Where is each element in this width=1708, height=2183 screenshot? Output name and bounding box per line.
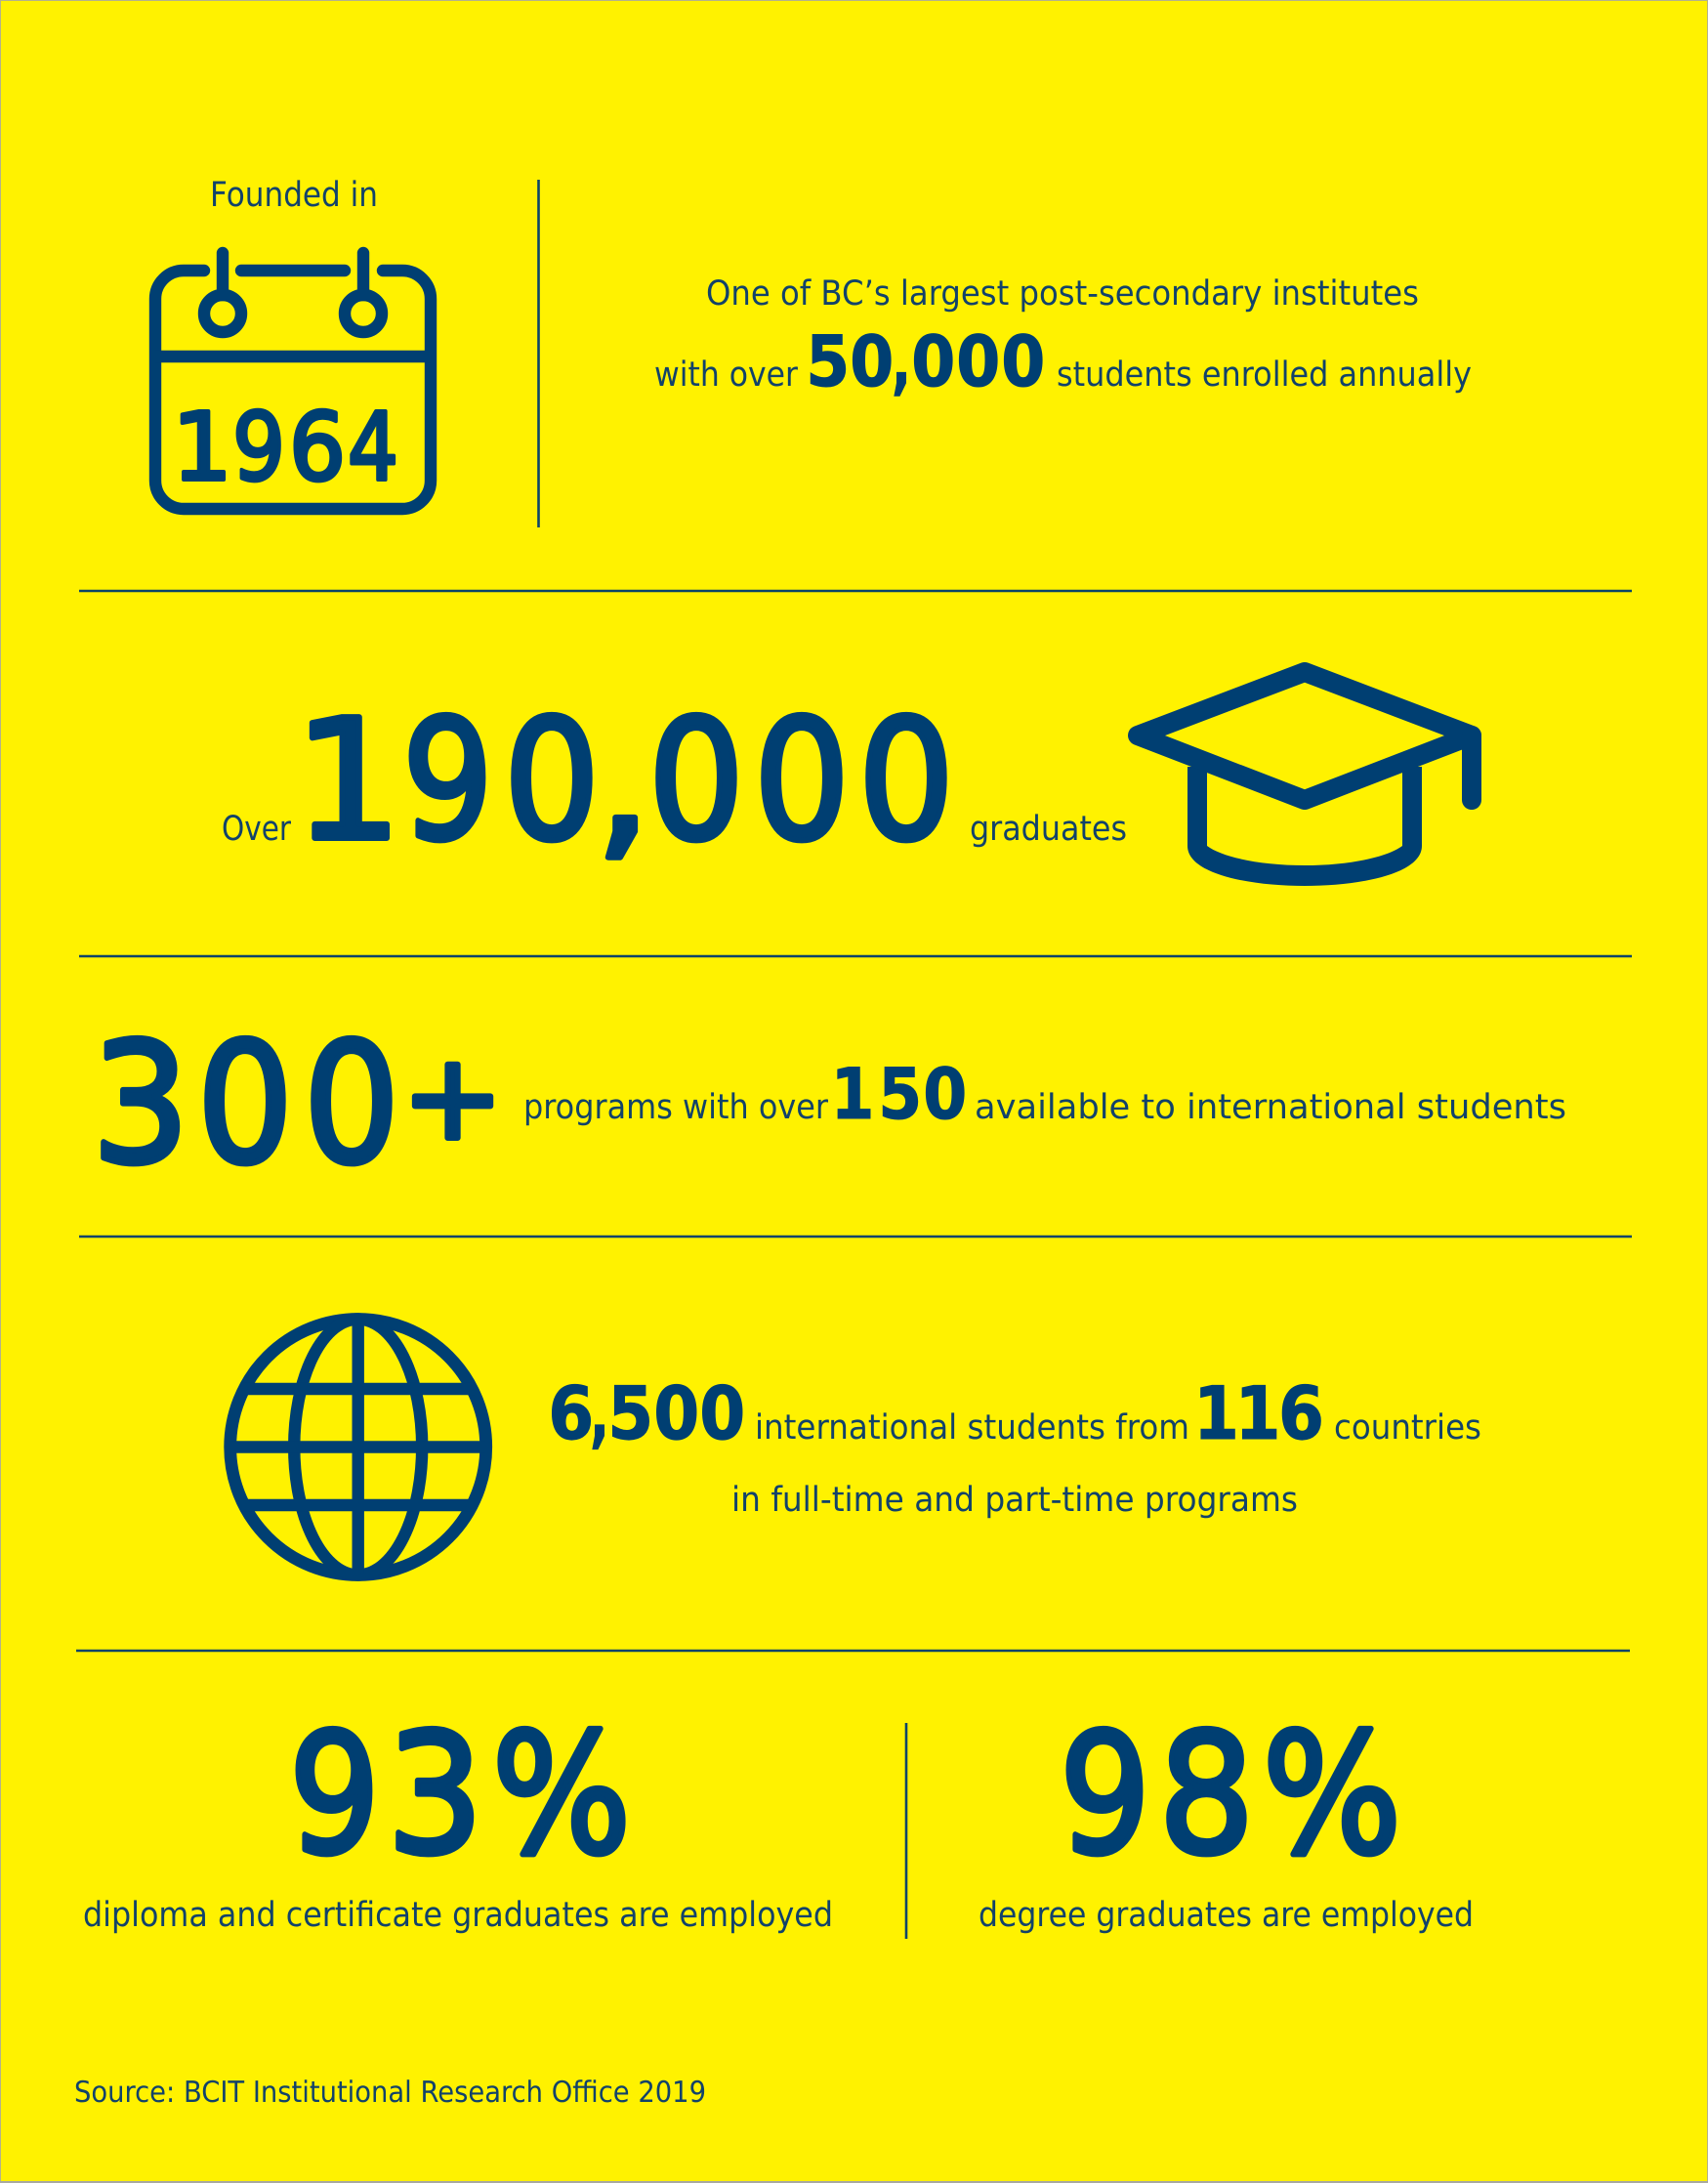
- panel: founded in 1964: [155, 176, 431, 509]
- text: international students from: international students from: [755, 1408, 1189, 1448]
- text: graduates: graduates: [970, 810, 1127, 849]
- text: countries: countries: [1334, 1408, 1481, 1448]
- stat: 98%: 9: [1060, 1699, 1150, 1892]
- stat: 190,000: 0: [504, 685, 600, 878]
- text: diploma caption: diploma and certificate graduates are employed: [83, 1896, 833, 1935]
- text: founded in: Founded in: [210, 176, 378, 215]
- panel: programs: [92, 1008, 1566, 1201]
- panel: enrolment: [654, 274, 1472, 402]
- stat: 6,500: 0: [653, 1370, 699, 1456]
- text: program types: in full-time and part-time programs: [731, 1481, 1298, 1520]
- stat: 190,000: 0: [858, 685, 954, 878]
- calendar year: 9: [232, 393, 285, 502]
- stat: 6,500: ,: [590, 1370, 609, 1456]
- icon: graduation cap: [1138, 672, 1472, 886]
- calendar year: 1: [172, 393, 232, 502]
- stat: 93%: %: [492, 1699, 631, 1892]
- stat: 190,000: ,: [595, 685, 652, 878]
- stat: 300+: 0: [304, 1008, 399, 1201]
- stat: 98%: 8: [1158, 1699, 1254, 1892]
- panel: graduates: [222, 672, 1472, 886]
- stat: 150: 0: [923, 1053, 967, 1135]
- text: available to international students: available to international students: [975, 1088, 1566, 1127]
- calendar year: 6: [289, 393, 346, 502]
- panel: degree employment: [979, 1699, 1474, 1935]
- text: over: Over: [222, 810, 292, 849]
- stat: 50,000: 0: [1001, 320, 1045, 402]
- source note: Source: BCIT Institutional Research Office 2019: [74, 2076, 706, 2110]
- calendar year: 4: [348, 393, 398, 502]
- stat: 6,500: 0: [699, 1370, 745, 1456]
- stat: 50,000: 0: [956, 320, 1000, 402]
- icon: calendar: [155, 253, 431, 509]
- stat: 150: 5: [878, 1053, 922, 1135]
- stat: 190,000: 0: [754, 685, 850, 878]
- stat: 190,000: 9: [402, 685, 493, 878]
- stat: 50,000: 0: [850, 320, 894, 402]
- text: degree caption: degree graduates are employed: [979, 1896, 1474, 1935]
- stat: 50,000: 0: [911, 320, 955, 402]
- stat: 6,500: 5: [607, 1370, 653, 1456]
- text: with over: with over: [654, 356, 799, 395]
- stat: 300+: 3: [92, 1008, 189, 1201]
- stat: 93%: 3: [387, 1699, 483, 1892]
- text: programs with over: programs with over: [523, 1088, 829, 1127]
- stat: 190,000: 1: [294, 685, 402, 878]
- panel: diploma employment: [83, 1699, 833, 1935]
- stat: 300+: 0: [197, 1008, 293, 1201]
- stat: 116: 6: [1278, 1370, 1324, 1456]
- text: students enrolled annually: students enrolled annually: [1057, 356, 1472, 395]
- stat: 190,000: 0: [648, 685, 744, 878]
- stat: 6,500: 6: [548, 1370, 594, 1456]
- icon: globe: [230, 1319, 486, 1574]
- stat: 300+: +: [402, 1030, 503, 1166]
- stat: 116: 1: [1234, 1370, 1281, 1456]
- stat: 116: 1: [1193, 1370, 1239, 1456]
- stat: 93%: 9: [289, 1699, 380, 1892]
- stat: 98%: %: [1263, 1699, 1401, 1892]
- text: institute description: One of BC’s largest post-secondary institutes: [706, 274, 1419, 314]
- stat: 50,000: 5: [806, 320, 850, 402]
- panel: international students: [230, 1319, 1481, 1574]
- stat: 50,000: ,: [892, 320, 911, 402]
- stat: 150: 1: [830, 1053, 875, 1135]
